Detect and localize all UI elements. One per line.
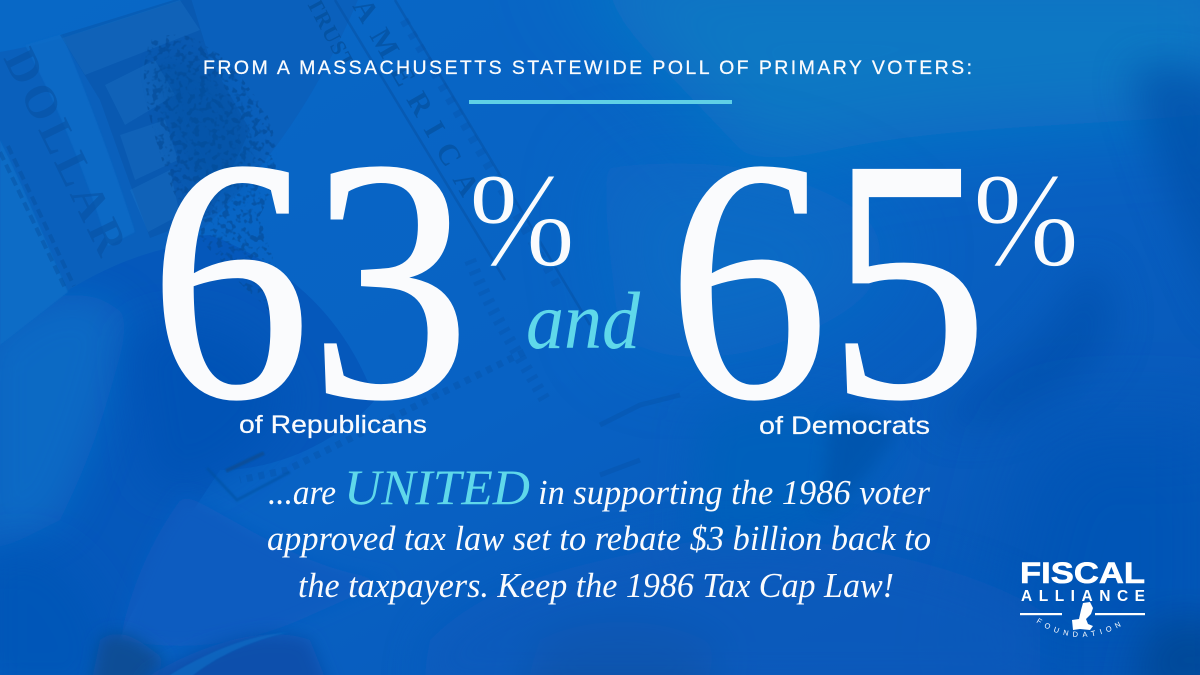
right dark hand shadow bbox=[1130, 66, 1200, 330]
banknote: left fold with portrait and tree engraving bbox=[0, 0, 360, 345]
statistic: 63 percent of Republicans: 63 bbox=[150, 89, 470, 471]
statistic: 65 percent of Democrats: of Democrats bbox=[759, 412, 930, 440]
light margin strip bbox=[25, 34, 135, 246]
accent divider bbox=[469, 100, 732, 104]
tree engraving bbox=[144, 35, 290, 330]
body statement: UNITED bbox=[344, 459, 530, 515]
body statement: in supporting the 1986 voter bbox=[538, 473, 930, 512]
statistic: 63 percent of Republicans: % bbox=[469, 146, 575, 294]
logo: Fiscal Alliance Foundation: ALLIANCE bbox=[1021, 588, 1145, 605]
body statement: approved tax law set to rebate $3 billion back to bbox=[267, 519, 931, 558]
body statement: ...are bbox=[268, 473, 336, 512]
logo: Fiscal Alliance Foundation bbox=[1020, 557, 1145, 638]
lower left fold and dark shadow bbox=[120, 495, 390, 646]
subtitle heading: FROM A MASSACHUSETTS STATEWIDE POLL OF PRIMARY VOTERS: bbox=[203, 57, 972, 79]
banknote: right band with In God We Trust and engraved lettering bbox=[207, 0, 680, 500]
logo: Fiscal Alliance Foundation: FISCAL bbox=[1020, 557, 1145, 590]
connector word: and: and bbox=[526, 275, 641, 366]
top band lighter teal blue bbox=[560, 0, 1200, 170]
icon: New England map silhouette bbox=[1072, 602, 1093, 630]
statistic: 63 percent of Republicans: of Republicans bbox=[239, 411, 427, 439]
left hand shape bbox=[0, 235, 375, 660]
body statement: the taxpayers. Keep the 1986 Tax Cap Law! bbox=[298, 566, 894, 605]
statistic: 65 percent of Democrats: % bbox=[973, 146, 1079, 294]
body statement bbox=[267, 459, 931, 605]
foundation arc label: FOUNDATION bbox=[1036, 618, 1121, 638]
center sheet lighter bbox=[600, 163, 900, 360]
building engraving bbox=[60, 0, 250, 238]
statistic: 65 percent of Democrats: 65 bbox=[668, 89, 988, 471]
